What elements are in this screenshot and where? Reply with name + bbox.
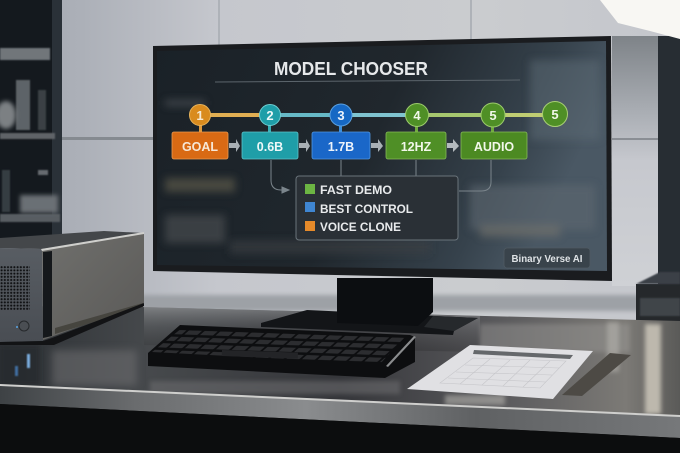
legend: voice clone: VOICE CLONE [320, 220, 401, 234]
end node 5 [542, 102, 568, 126]
monitor stand [261, 278, 478, 335]
flow step 2 [242, 104, 298, 159]
arrow: goal to 0.6B [229, 139, 240, 152]
ruler [562, 353, 631, 396]
watermark badge: Binary Verse AI [512, 254, 583, 265]
desk surface [0, 306, 680, 416]
flow step 1: 1 [196, 108, 204, 123]
flow step 2: 0.6B [257, 140, 283, 154]
arrow: 12HZ to audio [447, 139, 459, 152]
flow step 4 [386, 104, 446, 159]
arrow: 0.6B to 1.7B [299, 139, 310, 152]
legend connectors [271, 160, 491, 193]
keyboard [148, 325, 416, 378]
end node 5: 5 [551, 107, 559, 122]
flow step 5 [461, 103, 527, 159]
background wall [0, 0, 680, 322]
lamp top right [600, 0, 680, 39]
flow step 5: AUDIO [474, 140, 514, 154]
desk front edge [0, 384, 680, 453]
connector line [205, 113, 545, 117]
dark shelf left [0, 0, 62, 240]
watermark badge [504, 248, 590, 268]
dark shelf right [636, 36, 680, 322]
flow step 3: 1.7B [328, 140, 354, 154]
flow step 3: 3 [337, 108, 345, 123]
flow step 1: GOAL [182, 140, 218, 154]
monitor [153, 36, 612, 281]
flow step 5: 5 [489, 108, 497, 123]
arrow: 1.7B to 12HZ [371, 139, 383, 152]
paper sheet [407, 345, 593, 399]
flow step 4: 4 [413, 108, 421, 123]
screen background blur [165, 60, 600, 254]
legend: best control: BEST CONTROL [320, 202, 413, 216]
legend panel [296, 176, 458, 240]
legend: fast demo: FAST DEMO [320, 183, 392, 197]
title: MODEL CHOOSER [274, 58, 428, 79]
flow step 3 [312, 104, 370, 159]
flow step 4: 12HZ [401, 140, 432, 154]
flow step 2: 2 [266, 108, 274, 123]
computer case [0, 231, 144, 345]
desk reflections [0, 322, 661, 414]
flow step 1 [172, 104, 228, 159]
